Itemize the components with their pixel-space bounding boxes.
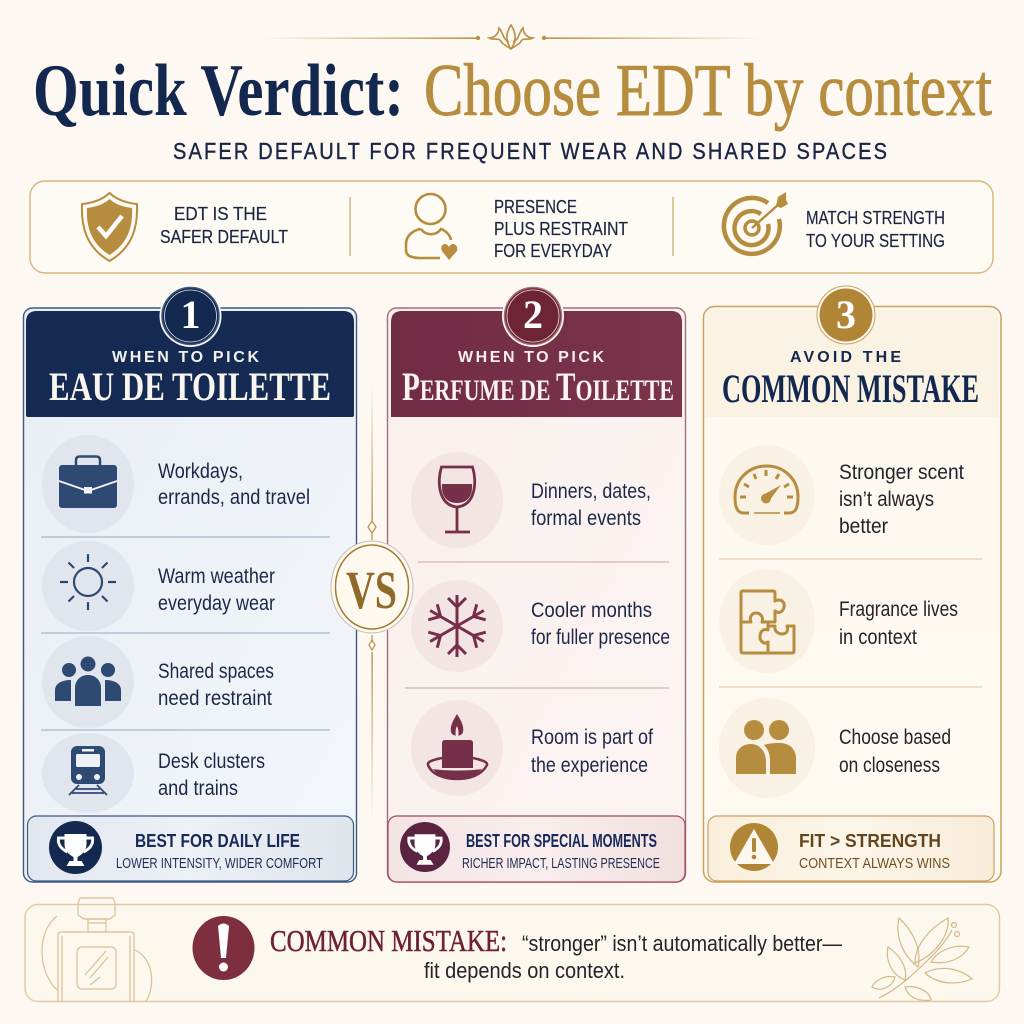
row: room bbox=[411, 700, 653, 796]
text: presence plus restraint bbox=[494, 197, 628, 261]
text: match strength: MATCH STRENGTH bbox=[806, 208, 945, 228]
icon: perfume bottle bbox=[42, 898, 152, 1002]
header: avoid the common mistake bbox=[706, 309, 998, 417]
ornament: top flourish bbox=[260, 25, 765, 49]
row: desk clusters: and trains bbox=[158, 777, 238, 800]
row: desk clusters: Desk clusters bbox=[158, 750, 265, 773]
row: workdays: errands, and travel bbox=[158, 486, 310, 509]
footer: best for daily life: LOWER INTENSITY, WIDER COMFORT bbox=[116, 855, 323, 872]
footer: best for special moments bbox=[388, 816, 685, 882]
row: warm weather: Warm weather bbox=[158, 565, 275, 588]
footer: fit over strength: CONTEXT ALWAYS WINS bbox=[799, 855, 950, 872]
title bbox=[33, 50, 992, 132]
icon: warning exclamation bbox=[192, 916, 254, 980]
footer: best for daily life: BEST FOR DAILY LIFE bbox=[135, 831, 300, 851]
row: shared spaces: Shared spaces bbox=[158, 660, 274, 683]
row: stronger scent: isn’t always bbox=[839, 488, 934, 511]
text: match strength bbox=[806, 208, 945, 251]
row: cooler months: for fuller presence bbox=[531, 626, 670, 649]
row: stronger scent bbox=[719, 445, 964, 545]
header: perfume de toilette bbox=[391, 311, 682, 417]
badge: number 1 bbox=[160, 285, 222, 347]
row: workdays: Workdays, bbox=[158, 460, 243, 483]
row: shared spaces: need restraint bbox=[158, 687, 272, 710]
header: eau de toilette bbox=[26, 311, 354, 417]
row: choose based on closeness: Choose based bbox=[839, 726, 951, 749]
title: Quick Verdict: bbox=[33, 50, 404, 132]
text: safer default: SAFER DEFAULT bbox=[160, 227, 288, 247]
icon: leaf sprig bbox=[872, 918, 972, 1000]
badge: number 2: 2 bbox=[523, 292, 543, 337]
header: eau de toilette: EAU DE TOILETTE bbox=[49, 364, 331, 409]
icon: person with heart bbox=[406, 194, 457, 260]
badge: number 3: 3 bbox=[836, 292, 856, 337]
panel: common mistake banner bbox=[25, 898, 1000, 1002]
text: common mistake statement: COMMON MISTAKE: bbox=[270, 923, 507, 958]
footer: fit over strength bbox=[708, 816, 994, 881]
text: common mistake statement: fit depends on context. bbox=[424, 958, 625, 983]
row: dinners: Dinners, dates, bbox=[531, 480, 651, 503]
row: dinners bbox=[411, 452, 651, 548]
row: fragrance lives in context: in context bbox=[839, 626, 917, 649]
text: presence plus restraint: PRESENCE bbox=[494, 197, 577, 217]
text: presence plus restraint: PLUS RESTRAINT bbox=[494, 219, 628, 239]
header: perfume de toilette: PERFUME DE TOILETTE bbox=[402, 364, 674, 409]
row: shared spaces bbox=[42, 636, 274, 728]
header: perfume de toilette: WHEN TO PICK bbox=[458, 349, 604, 366]
row: cooler months: Cooler months bbox=[531, 599, 652, 622]
text: match strength: TO YOUR SETTING bbox=[806, 231, 945, 251]
text: presence plus restraint: FOR EVERYDAY bbox=[494, 241, 612, 261]
row: workdays bbox=[42, 435, 310, 533]
text: safer default: EDT IS THE bbox=[174, 204, 267, 224]
panel: common mistake bbox=[704, 286, 1001, 882]
text: common mistake statement: “stronger” isn’t automatically better— bbox=[522, 931, 842, 956]
row: warm weather: everyday wear bbox=[158, 592, 275, 615]
row: room: Room is part of bbox=[531, 726, 653, 749]
row: desk clusters bbox=[42, 733, 265, 813]
subtitle: SAFER DEFAULT FOR FREQUENT WEAR AND SHARED SPACES bbox=[173, 137, 887, 164]
row: dinners: formal events bbox=[531, 507, 641, 530]
row: fragrance lives in context bbox=[719, 569, 958, 673]
panel: perfume de toilette bbox=[388, 285, 686, 882]
row: stronger scent: better bbox=[839, 515, 888, 538]
text: common mistake statement bbox=[270, 923, 842, 983]
footer: fit over strength: FIT > STRENGTH bbox=[799, 831, 941, 851]
text: safer default bbox=[160, 204, 288, 247]
divider: vs connector and badge bbox=[331, 380, 413, 822]
row: warm weather bbox=[42, 541, 275, 631]
panel: key takeaways strip bbox=[30, 181, 993, 273]
badge: number 2 bbox=[502, 285, 564, 347]
badge: number 3 bbox=[817, 286, 875, 344]
footer: best for special moments: RICHER IMPACT, LASTING PRESENCE bbox=[462, 855, 660, 872]
icon: target with arrow bbox=[724, 192, 788, 254]
badge: number 1: 1 bbox=[180, 292, 200, 337]
icon: shield with check bbox=[82, 193, 137, 261]
row: cooler months bbox=[411, 580, 670, 672]
header: avoid the common mistake: AVOID THE bbox=[790, 349, 901, 366]
divider: vs connector and badge: VS bbox=[346, 560, 397, 620]
panel: eau de toilette bbox=[24, 285, 356, 882]
footer: best for special moments: BEST FOR SPECIAL MOMENTS bbox=[466, 831, 657, 851]
row: choose based on closeness: on closeness bbox=[839, 754, 940, 777]
header: eau de toilette: WHEN TO PICK bbox=[112, 349, 259, 366]
row: choose based on closeness bbox=[719, 698, 951, 798]
row: stronger scent: Stronger scent bbox=[839, 461, 964, 484]
footer: best for daily life bbox=[28, 816, 354, 881]
row: fragrance lives in context: Fragrance lives bbox=[839, 598, 958, 621]
row: room: the experience bbox=[531, 754, 648, 777]
